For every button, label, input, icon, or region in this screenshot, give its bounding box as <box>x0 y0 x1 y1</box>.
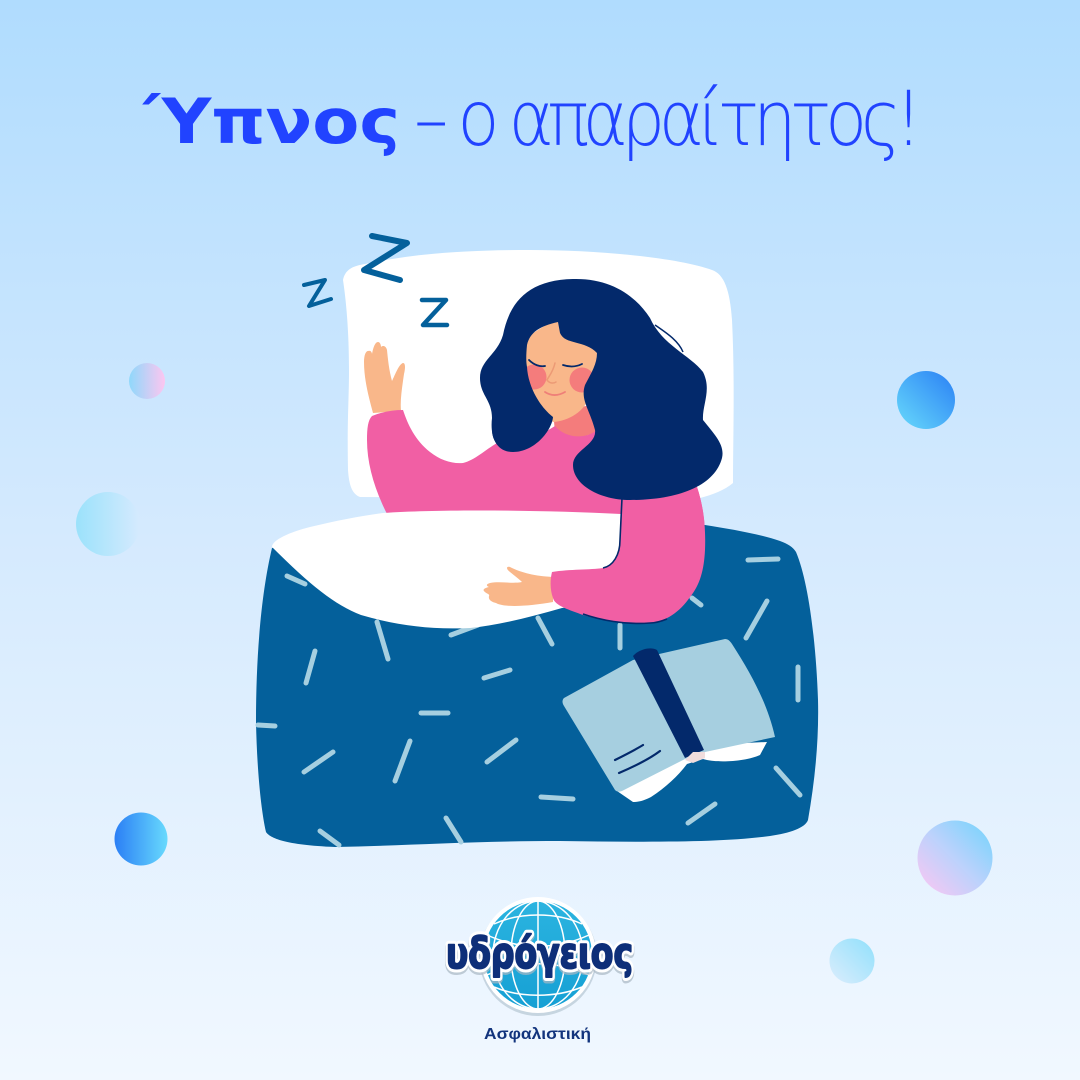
mouth <box>545 392 565 395</box>
lower hand <box>484 567 553 606</box>
logo wordmark shadow: υδρόγειος <box>446 931 633 981</box>
blanket <box>256 520 818 847</box>
hair <box>480 279 723 500</box>
title: Ύπνος <box>142 85 400 158</box>
neck <box>553 405 596 437</box>
lower arm <box>551 487 705 623</box>
decorative bubble: cyan lower right <box>830 938 874 984</box>
book spine end <box>685 752 705 763</box>
book text lines <box>615 745 660 773</box>
logo wordmark outline: υδρόγειος <box>446 929 633 979</box>
title: – ο απαραίτητος! <box>414 74 916 163</box>
decorative bubble: pink lower right <box>918 820 992 896</box>
face <box>522 316 600 422</box>
sleep symbol: large Z <box>364 236 407 280</box>
eyes <box>529 360 582 366</box>
decorative bubble: pale cyan left <box>76 492 140 556</box>
blanket fold <box>272 510 621 628</box>
decorative bubble: blue right <box>897 371 955 429</box>
pillow <box>343 250 734 498</box>
book <box>562 639 775 802</box>
globe <box>479 897 597 1016</box>
hair strands <box>493 325 683 443</box>
sleep symbol: small Z <box>304 280 331 306</box>
book cover <box>562 639 775 792</box>
title <box>142 74 916 163</box>
decorative bubble: small pink-blue left <box>129 363 165 399</box>
raised hand <box>364 342 405 413</box>
decorative bubble: blue lower left <box>114 812 168 866</box>
book pages <box>617 742 767 802</box>
logo <box>446 897 633 1043</box>
cheeks <box>522 364 594 392</box>
illustration: sleeping woman in bed <box>256 236 818 847</box>
blanket dashes <box>258 559 800 845</box>
book spine <box>633 648 704 758</box>
logo wordmark: υδρόγειος <box>446 929 633 979</box>
sweater <box>367 410 705 600</box>
logo subtitle: Ασφαλιστική <box>484 1026 591 1043</box>
sleeve outline <box>583 498 667 623</box>
nose <box>547 363 556 383</box>
sleep symbol: medium Z <box>422 300 447 325</box>
